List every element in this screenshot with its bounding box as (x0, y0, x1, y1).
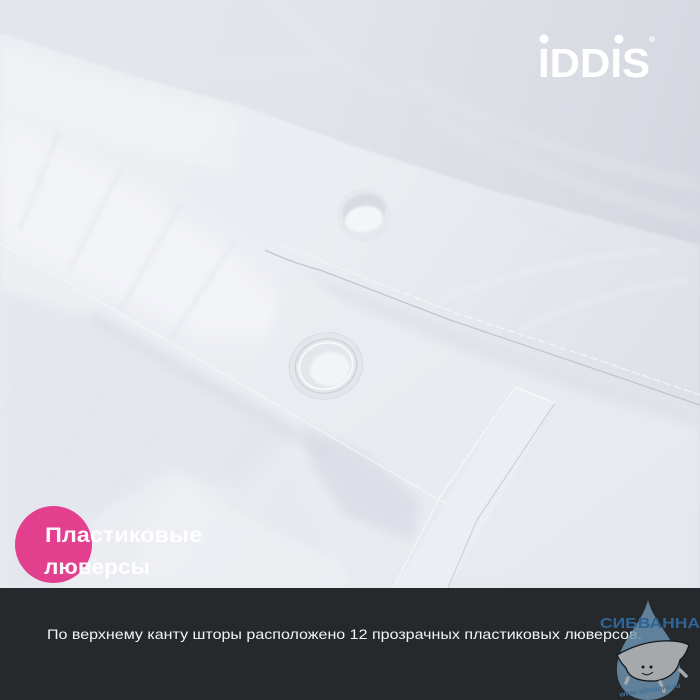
jacquard feather streaks on the upper fabric (60, 0, 700, 220)
icon: lower plastic eyelet (282, 325, 370, 407)
upper hem crease (265, 250, 700, 405)
crease shadow blotches (90, 316, 330, 456)
bright left fold (0, 110, 320, 340)
watermark: Sibvanna bath mascot: www.sibvanna.ru (618, 680, 681, 699)
streaks on the hem and left fold (0, 130, 700, 520)
callout: pink circle heading (15, 506, 208, 583)
corner flap (393, 387, 555, 590)
flap stitch (393, 390, 513, 588)
logo: iDDiS: IDDIS (538, 40, 650, 86)
stripes on the upper hem at right (440, 250, 690, 330)
fabric below the hem crease (260, 262, 700, 590)
upper hem band (0, 33, 700, 590)
flap edge (447, 403, 555, 590)
callout: pink circle heading: люверсы (44, 556, 150, 579)
watermark: Sibvanna bath mascot (600, 600, 700, 700)
watermark: Sibvanna bath mascot: СИБВАННА (600, 615, 700, 632)
icon: upper plastic eyelet (331, 182, 397, 248)
hem highlight and stitch (280, 245, 700, 395)
shade of the lower left fold (0, 290, 300, 590)
footer text: По верхнему канту шторы расположено 12 прозрачных пластиковых люверсов. (47, 626, 642, 642)
panel: dark footer (0, 588, 700, 700)
shadow under the hem corner (300, 425, 420, 540)
flap top edge (515, 387, 555, 403)
shade beneath upper hem crease (300, 270, 700, 428)
pale band near the upper left (0, 45, 240, 170)
callout: pink circle heading: Пластиковые (45, 524, 202, 547)
lower hem crease (0, 243, 470, 518)
lighter lower panel (130, 475, 350, 590)
